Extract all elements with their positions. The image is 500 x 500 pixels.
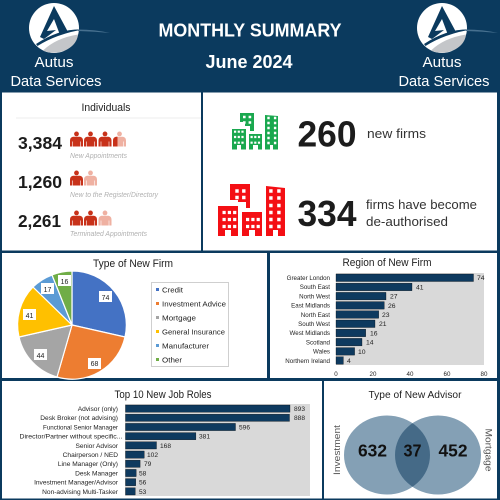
venn label: mortgage: Mortgage xyxy=(484,428,494,472)
job roles bar chart: 79 xyxy=(144,461,152,468)
venn label: investment: Investment xyxy=(332,424,342,475)
pie legend: General Insurance xyxy=(162,328,225,336)
pie legend: Investment Advice xyxy=(162,300,226,308)
stat: terminated appointments: 2,261 xyxy=(18,211,61,231)
pie data labels: 44 xyxy=(37,353,44,360)
job roles bar chart xyxy=(20,404,310,496)
job roles heading: Top 10 New Job Roles xyxy=(114,389,212,401)
region bar chart: 23 xyxy=(382,312,390,319)
logo: left: Autus xyxy=(34,54,74,71)
panel: type of new advisor xyxy=(324,381,497,498)
job roles bar chart: Director/Partner without specific... xyxy=(20,434,123,441)
icon: green buildings xyxy=(232,113,278,150)
venn diagram: 452 xyxy=(438,440,468,460)
stat: 260 new firms: new firms xyxy=(367,127,426,141)
stat: new to the register xyxy=(18,170,158,199)
venn diagram: 632 xyxy=(358,440,387,460)
region heading: Region of New Firm xyxy=(342,257,432,269)
region bar chart: 41 xyxy=(416,284,424,291)
stat: 334 de-authorised: firms have become xyxy=(366,198,477,212)
region bar chart: 21 xyxy=(379,321,387,328)
job roles bar chart: 596 xyxy=(239,424,250,431)
region bar chart: 40 xyxy=(407,371,414,378)
venn diagram xyxy=(344,416,481,494)
stat: 334 de-authorised xyxy=(298,193,477,234)
region bar chart: North East xyxy=(301,312,330,319)
stat: 260 new firms xyxy=(298,114,426,154)
job roles bar chart: Functional Senior Manager xyxy=(43,424,119,431)
region bar chart: West Midlands xyxy=(290,330,330,337)
region bar chart: 0 xyxy=(334,371,338,378)
stat: new appointments: 3,384 xyxy=(18,133,62,153)
region bar chart: South East xyxy=(300,284,330,291)
logo: right: Autus xyxy=(422,54,462,71)
title xyxy=(158,20,342,72)
region bar chart: 27 xyxy=(390,294,398,301)
icon: red buildings xyxy=(218,184,285,236)
job roles bar chart: 102 xyxy=(147,452,158,459)
job roles bar chart: 888 xyxy=(294,415,305,422)
pie data labels: 17 xyxy=(44,287,51,294)
region bar chart: South West xyxy=(298,321,330,328)
job roles bar chart: Line Manager (Only) xyxy=(58,461,118,468)
logo: right: Data Services xyxy=(398,73,490,90)
panel: individuals xyxy=(2,92,201,250)
stat: new appointments xyxy=(18,132,127,160)
pie data labels: 68 xyxy=(91,361,98,368)
job roles bar chart: Desk Broker (not advising) xyxy=(40,415,118,422)
pie legend: Manufacturer xyxy=(162,342,210,350)
stat: terminated appointments xyxy=(18,210,147,238)
job roles bar chart: 381 xyxy=(199,434,210,441)
pie legend: Credit xyxy=(162,286,184,294)
job roles bar chart: 168 xyxy=(160,443,171,450)
region bar chart: Wales xyxy=(313,349,330,356)
stat: terminated appointments: Terminated Appointments xyxy=(70,231,147,238)
stat: 334 de-authorised: 334 xyxy=(298,193,356,234)
pie legend: Mortgage xyxy=(162,314,196,322)
job roles bar chart: Senior Advisor xyxy=(75,443,119,450)
job roles bar chart: 893 xyxy=(294,406,305,413)
pie data labels: 41 xyxy=(26,313,33,320)
job roles bar chart: Non-advising Multi-Tasker xyxy=(42,489,119,496)
region bar chart: 16 xyxy=(370,330,378,337)
pie data labels xyxy=(23,275,112,369)
region bar chart: 20 xyxy=(370,371,377,378)
region bar chart: 80 xyxy=(481,371,488,378)
logo: left: Data Services xyxy=(10,73,102,90)
stat: new appointments: New Appointments xyxy=(70,153,127,160)
region bar chart: North West xyxy=(299,293,330,300)
stat: new to the register: New to the Register/Directory xyxy=(70,192,158,199)
job roles bar chart: 58 xyxy=(139,470,147,477)
panel: top 10 new job roles xyxy=(2,381,322,498)
stat: 334 de-authorised: de-authorised xyxy=(366,215,448,229)
pie chart xyxy=(18,271,126,379)
pie legend xyxy=(152,282,228,366)
region bar chart: 26 xyxy=(388,303,396,310)
job roles bar chart: Chairperson / NED xyxy=(63,452,118,459)
logo: right xyxy=(398,3,498,90)
region bar chart: East Midlands xyxy=(291,303,330,310)
region bar chart: 60 xyxy=(444,371,451,378)
stat: new to the register: 1,260 xyxy=(18,172,62,192)
pie data labels: 74 xyxy=(102,295,109,302)
region bar chart: Northern Ireland xyxy=(285,358,331,365)
stat: 260 new firms: 260 xyxy=(298,114,356,154)
panel: type of new firm xyxy=(2,253,267,379)
job roles bar chart: Investment Manager/Advisor xyxy=(34,480,119,487)
title: June 2024 xyxy=(206,52,292,72)
pie heading: Type of New Firm xyxy=(93,258,173,270)
pie legend: Other xyxy=(162,356,183,364)
region bar chart: 4 xyxy=(347,358,351,365)
job roles bar chart: Desk Manager xyxy=(75,470,119,477)
pie data labels: 16 xyxy=(61,279,68,286)
region bar chart: 14 xyxy=(366,340,374,347)
job roles bar chart: 53 xyxy=(139,489,147,496)
region bar chart: 74 xyxy=(477,275,485,282)
region bar chart: 10 xyxy=(358,349,366,356)
venn heading: Type of New Advisor xyxy=(368,390,462,401)
logo: left xyxy=(10,3,110,90)
panel: region of new firm xyxy=(270,253,497,378)
title: MONTHLY SUMMARY xyxy=(158,20,342,40)
individuals heading: Individuals xyxy=(82,102,131,114)
venn diagram: 37 xyxy=(404,440,422,460)
region bar chart: Greater London xyxy=(287,275,331,282)
job roles bar chart: Advisor (only) xyxy=(78,406,118,413)
region bar chart xyxy=(285,273,488,378)
job roles bar chart: 56 xyxy=(139,480,147,487)
region bar chart: Scotland xyxy=(306,339,331,346)
panel: firms xyxy=(203,92,497,250)
